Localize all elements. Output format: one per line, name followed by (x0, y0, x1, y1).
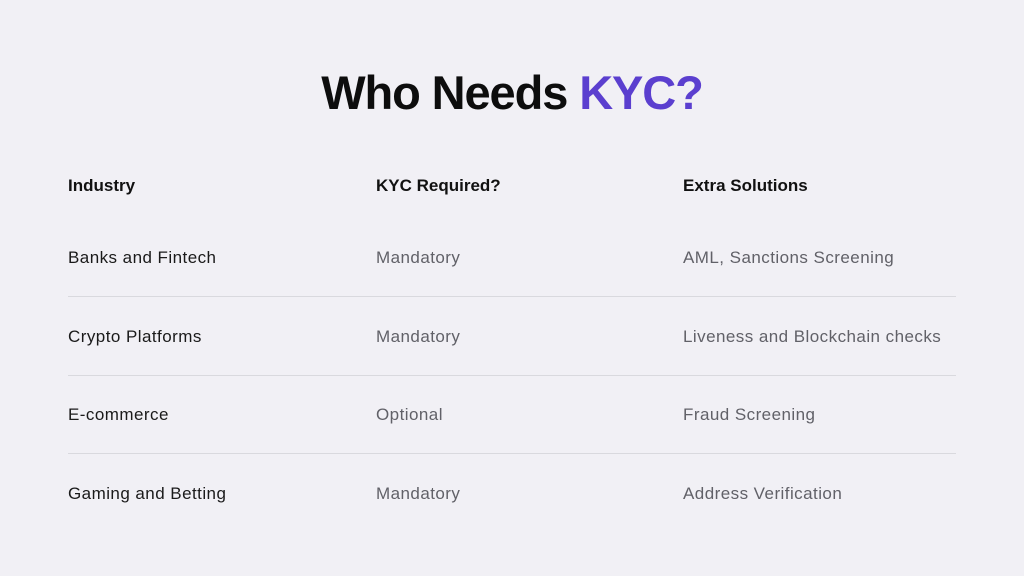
row: ecommerce (68, 405, 815, 424)
row: crypto: Liveness and Blockchain checks (683, 327, 941, 346)
row: ecommerce: Optional (376, 405, 443, 424)
row: gaming: Gaming and Betting (68, 484, 226, 503)
row: ecommerce: Fraud Screening (683, 405, 815, 424)
row: gaming: Address Verification (683, 484, 842, 503)
row: gaming (68, 484, 842, 503)
header row: KYC Required? (376, 176, 501, 195)
header row: Industry (68, 176, 135, 195)
row: crypto: Mandatory (376, 327, 460, 346)
row: banks: AML, Sanctions Screening (683, 248, 894, 267)
header row (68, 176, 808, 195)
row: ecommerce: E-commerce (68, 405, 169, 424)
row: crypto: Crypto Platforms (68, 327, 202, 346)
row: banks (68, 248, 894, 267)
header row: Extra Solutions (683, 176, 808, 195)
table (68, 176, 956, 503)
row: gaming: Mandatory (376, 484, 460, 503)
row: banks: Mandatory (376, 248, 460, 267)
row: crypto (68, 327, 941, 346)
row: banks: Banks and Fintech (68, 248, 216, 267)
title: Who Needs KYC? (321, 66, 703, 119)
